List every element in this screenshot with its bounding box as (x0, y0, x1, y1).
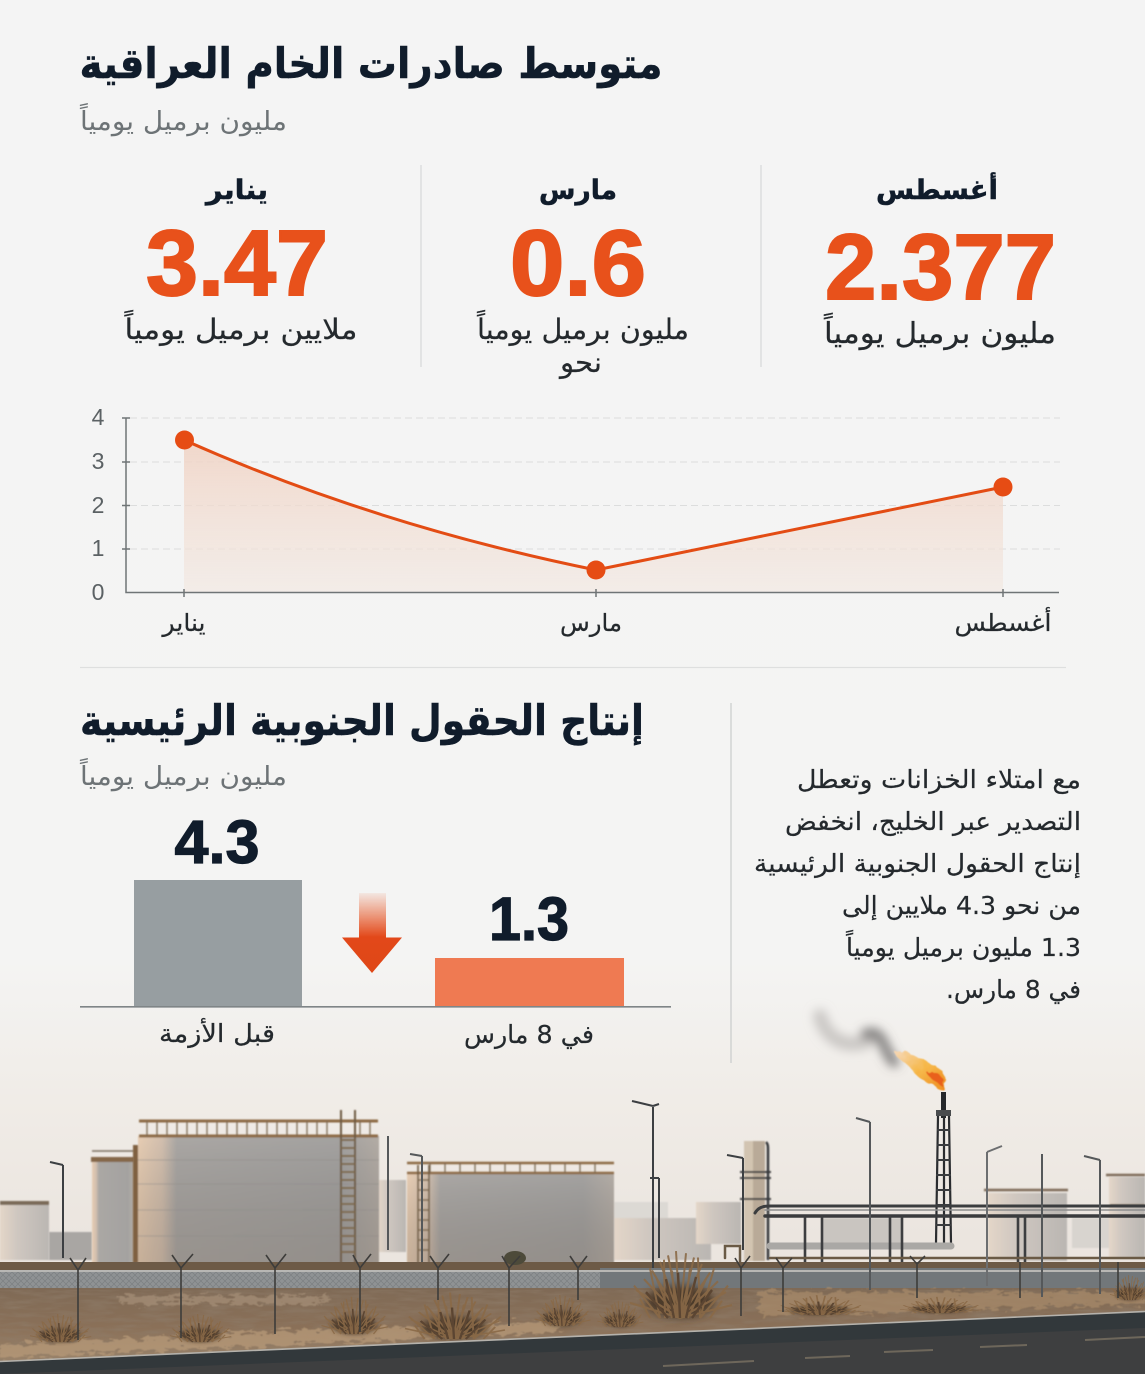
ground strip and fence wall (0, 1262, 1145, 1292)
x axis labels (161, 607, 1052, 637)
value: 1.3: 1.3 (489, 885, 569, 953)
heading: southern fields output: إنتاج الحقول الجنوبية الرئيسية (80, 696, 644, 746)
subtitle: unit: مليون برميل يومياً (79, 102, 287, 137)
text block: explanation: في 8 مارس. (946, 975, 1081, 1004)
text block: explanation: التصدير عبر الخليج، انخفض (785, 807, 1081, 837)
y axis labels: 1 (92, 535, 104, 561)
flare stack tower (936, 1092, 951, 1243)
kpi: march: مارس (539, 175, 617, 206)
text block: explanation: مع امتلاء الخزانات وتعطل (797, 765, 1081, 795)
bar: before crisis (134, 880, 302, 1006)
wide storage tank (407, 1163, 614, 1263)
y axis labels: 4 (92, 404, 105, 430)
text block: explanation: إنتاج الحقول الجنوبية الرئيسية (754, 849, 1081, 879)
label: 8 march: في 8 مارس (464, 1020, 594, 1049)
photo: oil refinery and storage tanks (0, 1016, 1145, 1374)
x axis labels: يناير (161, 609, 206, 637)
x axis labels: أغسطس (954, 607, 1052, 637)
kpi: august (824, 172, 1056, 350)
smoke plume (820, 1016, 894, 1062)
kpi: august: أغسطس (876, 172, 998, 206)
street lamps (50, 1101, 1100, 1297)
chart points (175, 430, 1012, 580)
kpi: march: 0.6 (510, 211, 646, 315)
kpi: august: 2.377 (825, 215, 1056, 319)
chart line (184, 440, 1003, 570)
right storage tanks (984, 1175, 1145, 1261)
label: before crisis: قبل الأزمة (159, 1017, 275, 1048)
kpi: march: مليون برميل يومياً (477, 309, 689, 346)
tall storage tank (91, 1151, 134, 1264)
pipe rack (725, 1206, 1145, 1262)
text block: explanation: 1.3 مليون برميل يومياً (845, 930, 1081, 962)
kpi: january: 3.47 (146, 211, 328, 315)
text block: explanation: من نحو 4.3 ملايين إلى (842, 891, 1081, 921)
y axis labels: 3 (92, 448, 104, 474)
kpi: august: مليون برميل يومياً (824, 313, 1056, 350)
bar chart: before and after (80, 808, 671, 1049)
chart area fill (184, 440, 1003, 592)
left storage tank (0, 1201, 49, 1260)
kpi: march: نحو (558, 346, 602, 379)
fence posts (70, 1254, 1118, 1340)
x axis labels: مارس (560, 609, 622, 637)
y axis labels (92, 404, 105, 605)
arrow: decline (342, 893, 402, 973)
value: 4.3: 4.3 (174, 808, 260, 876)
process column (740, 1141, 771, 1261)
kpi: january: ملايين برميل يومياً (124, 309, 358, 346)
text block: explanation (754, 765, 1081, 1004)
y axis labels: 0 (92, 579, 104, 605)
y axis labels: 2 (92, 492, 104, 518)
title: iraqi crude exports: متوسط صادرات الخام العراقية (80, 39, 662, 89)
kpi: january: يناير (204, 175, 268, 206)
kpi: january (124, 175, 358, 346)
background tanks (49, 1180, 1110, 1260)
dry bushes (30, 1251, 1145, 1342)
subtitle: unit: مليون برميل يومياً (79, 757, 287, 792)
desert ground (0, 1288, 1145, 1366)
chart axes (122, 418, 1059, 597)
kpi: march (477, 175, 689, 379)
flare flame (895, 1051, 946, 1091)
large storage tank (133, 1110, 379, 1266)
line chart: monthly exports (92, 404, 1060, 637)
road (0, 1312, 1145, 1374)
bar: 8 march (435, 958, 624, 1006)
